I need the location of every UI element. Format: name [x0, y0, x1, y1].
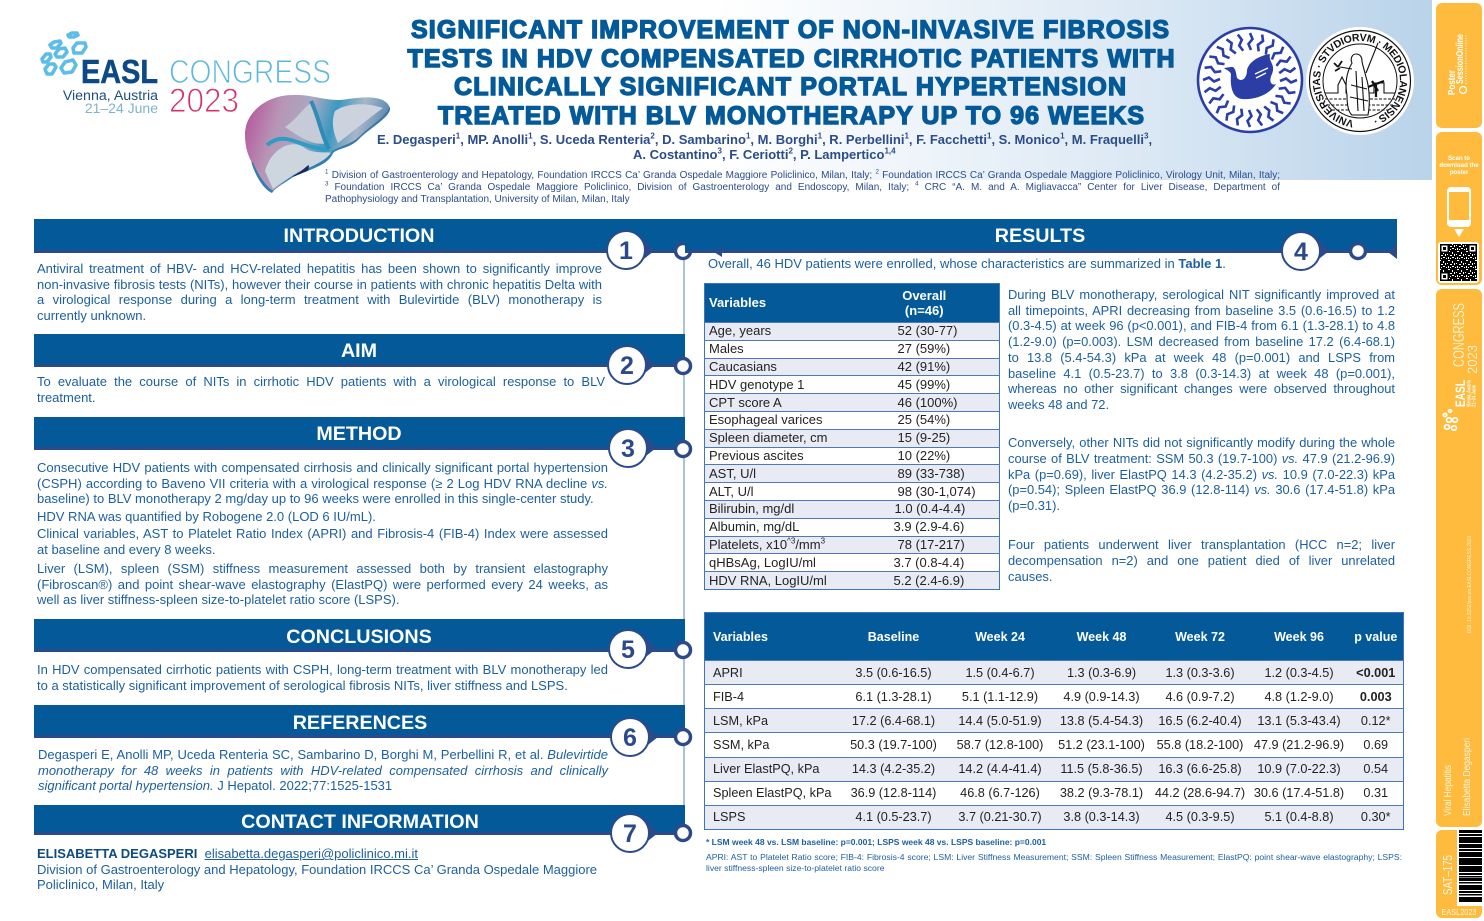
table 2: NIT values over time: LSPS: [713, 810, 745, 824]
blue university seal: [1196, 26, 1304, 134]
table 2: NIT values over time: 13.8 (5.4-54.3): [1060, 714, 1143, 728]
banner: references: [34, 705, 690, 756]
text: aim: To evaluate the course of NITs in cirrhotic HDV patients with a virological response to BLV: [37, 374, 605, 389]
table footnote: abbreviations: liver stiffness-spleen size-to-platelet ratio score: [706, 862, 884, 872]
dates: 21–24 June: [85, 100, 158, 116]
table 2: NIT values over time: 16.5 (6.2-40.4): [1158, 714, 1242, 728]
scan caption: Scan to: [1448, 154, 1470, 162]
table 2: NIT values over time: 46.8 (6.7-126): [960, 786, 1040, 800]
divider: column connector: [683, 253, 685, 830]
table 1: baseline characteristics: 1.0 (0.4-4.4): [894, 501, 965, 516]
table 2: NIT values over time: 17.2 (6.4-68.1): [852, 714, 935, 728]
table 2: NIT values over time: Week 24: [975, 630, 1025, 644]
header gradient background: [0, 0, 1432, 180]
text: results findings: [1008, 287, 1396, 584]
poster session online wordmark: Poster: [1447, 70, 1458, 95]
banner: references: 6: [623, 724, 637, 752]
table 2: NIT values over time: LSM, kPa: [713, 714, 768, 728]
icon: down arrow: [1454, 229, 1464, 237]
table 2: NIT values over time: 36.9 (12.8-114): [851, 786, 936, 800]
text: contact: [37, 846, 597, 892]
table 2: NIT values over time: [704, 612, 1404, 830]
affiliations: 1 Division of Gastroenterology and Hepatology, Foundation IRCCS Ca’ Granda Ospedale Maggiore Policlinico, Milan, Italy; 2 Foundation IRCCS Ca’ Granda Ospedale Maggiore Policlinico, Virology Unit, Milan, Italy;: [325, 169, 1280, 181]
table 2: NIT values over time: Spleen ElastPQ, kPa: [713, 786, 831, 800]
rotated location and dates: [1466, 379, 1478, 407]
rotated presenter: Elisabetta Degasperi: [1462, 738, 1473, 816]
table 1: baseline characteristics: ALT, U/l: [709, 484, 754, 499]
table 2: NIT values over time: 58.7 (12.8-100): [957, 738, 1043, 752]
table 2: NIT values over time: 3.5 (0.6-16.5): [855, 666, 932, 680]
text: introduction: a virological response during a long-term treatment with Bulevirtide (BLV) monotherapy is: [37, 292, 602, 307]
table 2: NIT values over time: 6.1 (1.3-28.1): [855, 690, 932, 704]
text: method: well as liver stiffness-spleen size-to-platelet ratio score (LSPS).: [37, 592, 399, 607]
table 1: baseline characteristics: 89 (33-738): [898, 466, 965, 481]
table 2: NIT values over time: Week 96: [1274, 630, 1324, 644]
table 1: baseline characteristics: 3.9 (2.9-4.6): [894, 519, 964, 534]
title: CLINICALLY SIGNIFICANT PORTAL HYPERTENSION: [454, 73, 1126, 101]
text: aim: treatment.: [37, 390, 96, 405]
table 2: NIT values over time: Liver ElastPQ, kPa: [713, 762, 819, 776]
banner: contact information: CONTACT INFORMATION: [241, 811, 479, 833]
table 1: baseline characteristics: 78 (17-217): [898, 537, 965, 552]
table 2: NIT values over time: Week 48: [1077, 630, 1126, 644]
barcode: [1457, 830, 1482, 906]
table 2: NIT values over time: 0.12*: [1361, 714, 1391, 728]
text: method: [37, 460, 608, 607]
text: conclusions: In HDV compensated cirrhotic patients with CSPH, long-term treatment with BLV monotherapy led: [37, 662, 608, 677]
banner: results: RESULTS: [995, 225, 1085, 247]
text: introduction: Antiviral treatment of HBV- and HCV-related hepatitis has been shown to significantly improve: [37, 261, 602, 276]
table footnote: significance: * LSM week 48 vs. LSM baseline: p=0.001; LSPS week 48 vs. LSPS baseline: p=0.001: [706, 837, 1046, 847]
banner: contact information: 7: [623, 820, 637, 848]
text: conclusions: to a statistically significant improvement of serological fibrosis NITs, liver stiffness and LSPS.: [37, 678, 568, 693]
rotated EASL mark: EASL: [1452, 380, 1468, 407]
text: introduction: non-invasive fibrosis tests (NITs), however their course in patients with chronic hepatitis Delta with: [37, 277, 602, 292]
table 1: baseline characteristics: (n=46): [905, 303, 944, 318]
table 2: NIT values over time: 4.9 (0.9-14.3): [1063, 690, 1140, 704]
text: method: Clinical variables, AST to Platelet Ratio Index (APRI) and Fibrosis-4 (FIB-4) Index were assessed: [37, 526, 608, 541]
text: results findings: baseline 4.1 (0.5-23.7) to 3.8 (0.3-14.3) at week 48 (p=0.001),: [1008, 366, 1395, 381]
text: references: Degasperi E, Anolli MP, Uceda Renteria SC, Sambarino D, Borghi M, Perbellini R, et al. Bulevirtide: [38, 747, 608, 762]
table 2: NIT values over time: 30.6 (17.4-51.8): [1254, 786, 1344, 800]
table 2: NIT values over time: Week 72: [1175, 630, 1225, 644]
EASL congress logo: [40, 31, 331, 120]
table 1: baseline characteristics: Platelets, x10^3/mm3: [709, 537, 825, 552]
table 2: NIT values over time: 47.9 (21.2-96.9): [1254, 738, 1344, 752]
sidebar panel: poster number and barcode: [1436, 830, 1482, 918]
text: references: monotherapy for 48 weeks in patients with HDV-related compensated cirrhosis and clinically: [38, 763, 608, 778]
authors: E. Degasperi1, MP. Anolli1, S. Uceda Renteria2, D. Sambarino1, M. Borghi1, R. Perbellini1, F. Facchetti1, S. Monico1, M. Fraquelli3,: [377, 131, 1152, 146]
rotated congress year: 2023: [1464, 345, 1480, 374]
table 1: baseline characteristics: Albumin, mg/dL: [709, 519, 799, 534]
QR code: [1438, 242, 1479, 283]
text: method: (Fibroscan®) and point shear-wave elastography (ElastPQ) were performed every 24 weeks, as: [37, 577, 608, 592]
text: results findings: weeks 48 and 72.: [1008, 397, 1109, 412]
EASL wordmark: EASL: [81, 53, 158, 90]
table 1: baseline characteristics: Spleen diameter, cm: [709, 430, 828, 445]
table 1: baseline characteristics: 98 (30-1,074): [898, 484, 976, 499]
table 2: NIT values over time: 38.2 (9.3-78.1): [1060, 786, 1143, 800]
banner: introduction: INTRODUCTION: [284, 225, 434, 247]
table 1: baseline characteristics: Bilirubin, mg/dl: [709, 501, 794, 516]
table 1: baseline characteristics: 42 (91%): [898, 359, 950, 374]
text: references: significant portal hypertension. J Hepatol. 2022;77:1525-1531: [38, 778, 392, 793]
table 2: NIT values over time: p value: [1354, 630, 1397, 644]
table 1: baseline characteristics: Age, years: [709, 323, 771, 338]
affiliations: Pathophysiology and Transplantation, University of Milan, Milan, Italy: [325, 194, 630, 205]
table 2: NIT values over time: 14.3 (4.2-35.2): [852, 762, 935, 776]
sidebar panel: scan to download: [1436, 132, 1482, 285]
text: results findings: Conversely, other NITs did not significantly modify during the whole: [1008, 435, 1395, 450]
table 2: NIT values over time: 3.8 (0.3-14.3): [1063, 810, 1140, 824]
seal lettering: VNIVERSITAS · STVDIORVM · MEDIOLANENSIS ·: [1312, 34, 1408, 128]
banner: contact information: [34, 805, 690, 852]
icon: hexagon cluster: [1443, 410, 1458, 430]
table 2: NIT values over time: 4.5 (0.3-9.5): [1165, 810, 1235, 824]
table 2: NIT values over time: 4.8 (1.2-9.0): [1264, 690, 1334, 704]
table 1: baseline characteristics: CPT score A: [709, 395, 782, 410]
table 2: NIT values over time: 0.30*: [1361, 810, 1391, 824]
text: method: HDV RNA was quantified by Robogene 2.0 (LOD 6 IU/mL).: [37, 509, 376, 524]
table 1: baseline characteristics: 5.2 (2.4-6.9): [894, 573, 964, 588]
location: Vienna, Austria: [63, 88, 158, 104]
scan caption: poster: [1450, 168, 1468, 176]
table 2: NIT values over time: Variables: [713, 630, 768, 644]
table 1: baseline characteristics: 45 (99%): [898, 377, 950, 392]
text: results findings: causes.: [1008, 569, 1052, 584]
text: results findings: to 13.8 (5.4-54.3) kPa at week 48 (p=0.001) and LSPS from: [1008, 350, 1395, 365]
table 2: NIT values over time: 4.6 (0.9-7.2): [1165, 690, 1235, 704]
text: introduction: [37, 261, 602, 323]
table 1: baseline characteristics: Males: [709, 341, 744, 356]
rotated congress name: CONGRESS: [1451, 303, 1468, 367]
banner: references: REFERENCES: [293, 712, 427, 734]
banner: method: 3: [621, 435, 635, 463]
text: results intro: Overall, 46 HDV patients were enrolled, whose characteristics are summarized in Table 1.: [708, 256, 1226, 271]
text: contact: Division of Gastroenterology and Hepatology, Foundation IRCCS Ca’ Granda Ospedale Maggiore: [37, 862, 597, 877]
table 2: NIT values over time: 51.2 (23.1-100): [1058, 738, 1145, 752]
banner: introduction: 1: [619, 237, 633, 265]
table 2: NIT values over time: 55.8 (18.2-100): [1157, 738, 1243, 752]
table 1: baseline characteristics: Variables: [709, 295, 766, 310]
banner: results: [685, 219, 1397, 270]
table footnote: abbreviations: APRI: AST to Platelet Ratio score; FIB-4: Fibrosis-4 score; LSM: Liver Stiffness Measurement; SSM: Spleen Stiffness Measurement; ElastPQ: point shear-wave elastography; LSPS:: [706, 852, 1402, 862]
table 1: baseline characteristics: Previous ascites: [709, 448, 804, 463]
rotated DOI: DOI: 10.3252/pso.eu.EASLCONGRESS.2023: [1467, 536, 1473, 633]
table 2: NIT values over time: FIB-4: [713, 690, 744, 704]
table 1: baseline characteristics: 27 (59%): [898, 341, 950, 356]
rotated location and dates: 21–24 June: [1472, 385, 1478, 407]
text: conclusions: [37, 662, 608, 693]
poster session online wordmark: [1447, 34, 1466, 95]
banner: method: [34, 417, 690, 467]
text: references: [38, 747, 609, 793]
conference tag: EASL2023: [1442, 907, 1477, 917]
title: TESTS IN HDV COMPENSATED CIRRHOTIC PATIENTS WITH: [408, 45, 1174, 73]
table 2: NIT values over time: 1.3 (0.3-6.9): [1067, 666, 1136, 680]
banner: conclusions: [34, 619, 690, 668]
text: results findings: whereas no other significant changes were observed throughout: [1008, 381, 1395, 396]
banner: aim: AIM: [341, 340, 377, 362]
sidebar panel: poster session online: [1436, 3, 1482, 128]
rotated poster number: SAT–175: [1440, 855, 1455, 895]
table 2: NIT values over time: 0.69: [1363, 738, 1388, 752]
table 1: baseline characteristics: HDV RNA, LogIU/ml: [709, 573, 827, 588]
text: introduction: currently unknown.: [37, 308, 146, 323]
table 2: NIT values over time: 5.1 (1.1-12.9): [962, 690, 1038, 704]
text: contact: Policlinico, Milan, Italy: [37, 877, 164, 892]
table 1: baseline characteristics: 25 (54%): [898, 412, 950, 427]
table 2: NIT values over time: 3.7 (0.21-30.7): [958, 810, 1042, 824]
table 1: baseline characteristics: 52 (30-77): [898, 323, 957, 338]
table 2: NIT values over time: 11.5 (5.8-36.5): [1060, 762, 1143, 776]
scan caption: [1439, 154, 1479, 176]
table 1: baseline characteristics: AST, U/l: [709, 466, 756, 481]
table footnote: abbreviations: [706, 852, 1402, 872]
table 2: NIT values over time: 10.9 (7.0-22.3): [1257, 762, 1341, 776]
table 2: NIT values over time: 14.4 (5.0-51.9): [958, 714, 1042, 728]
seal bird: [1224, 54, 1276, 99]
text: results findings: Four patients underwent liver transplantation (HCC n=2; liver: [1008, 537, 1395, 552]
Milan university seal: [1306, 27, 1414, 135]
table 2: NIT values over time: APRI: [713, 666, 743, 680]
table 2: NIT values over time: 1.2 (0.3-4.5): [1264, 666, 1334, 680]
table 2: NIT values over time: SSM, kPa: [713, 738, 769, 752]
sidebar panel: congress details: [1436, 289, 1482, 827]
banner: method: METHOD: [316, 423, 402, 445]
icon: phone: [1447, 187, 1471, 227]
table 1: baseline characteristics: qHBsAg, LogIU/ml: [709, 555, 816, 570]
text: contact: ELISABETTA DEGASPERI elisabetta.degasperi@policlinico.mi.it: [37, 846, 418, 861]
banner: aim: [34, 334, 690, 384]
rotated topic: Viral Hepatitis: [1443, 765, 1454, 816]
table 1: baseline characteristics: Overall: [902, 288, 946, 302]
affiliations: 3 Foundation IRCCS Ca’ Granda Ospedale Maggiore Policlinico, Division of Gastroenterology and Endoscopy, Milan, Italy; 4 CRC “A. M. and A. Migliavacca” Center for Liver Disease, Department of: [325, 181, 1280, 193]
text: results findings: During BLV monotherapy, serological NIT significantly improved at: [1008, 287, 1395, 302]
text: results findings: course of BLV treatment: SSM 50.3 (19.7-100) vs. 47.9 (21.2-96.9): [1008, 451, 1395, 466]
title: TREATED WITH BLV MONOTHERAPY UP TO 96 WEEKS: [438, 102, 1144, 130]
text: method: Consecutive HDV patients with compensated cirrhosis and clinically significant portal hypertension: [37, 460, 608, 475]
text: aim: [37, 374, 605, 405]
scan caption: download the: [1439, 162, 1479, 168]
text: method: Liver (LSM), spleen (SSM) stiffness measurement assessed both by transient elastography: [37, 561, 608, 576]
table 1: baseline characteristics: 10 (22%): [898, 448, 950, 463]
table 1: baseline characteristics: [704, 283, 1000, 590]
text: results findings: (0.3-4.5) at week 96 (p<0.001), and FIB-4 from 6.1 (1.3-28.1) to 4.8: [1008, 318, 1395, 333]
banner: conclusions: CONCLUSIONS: [286, 626, 432, 648]
table 2: NIT values over time: 1.5 (0.4-6.7): [965, 666, 1035, 680]
table 1: baseline characteristics: Esophageal varices: [709, 412, 822, 427]
table 2: NIT values over time: Baseline: [868, 630, 919, 644]
text: results findings: kPa (p=0.69), liver ElastPQ 14.3 (4.2-35.2) vs. 10.9 (7.0-22.3) kPa: [1008, 467, 1395, 482]
text: method: baseline) to BLV monotherapy 2 mg/day up to 96 weeks were enrolled in this single-center study.: [37, 491, 594, 506]
seal rays: [1203, 33, 1297, 127]
table 2: NIT values over time: 0.31: [1363, 786, 1388, 800]
table 2: NIT values over time: <0.001: [1356, 666, 1395, 680]
authors: [377, 131, 1152, 162]
liver illustration: [245, 94, 390, 193]
authors: A. Costantino3, F. Ceriotti2, P. Lampertico1,4: [633, 146, 896, 162]
title: [407, 16, 1174, 130]
seal figure: [1325, 43, 1395, 115]
title: SIGNIFICANT IMPROVEMENT OF NON-INVASIVE FIBROSIS: [411, 16, 1169, 44]
table 1: baseline characteristics: 46 (100%): [898, 395, 957, 410]
affiliations: [325, 169, 1280, 205]
table 2: NIT values over time: 4.1 (0.5-23.7): [855, 810, 932, 824]
banner: aim: 2: [620, 352, 634, 380]
table 2: NIT values over time: 0.54: [1363, 762, 1388, 776]
text: method: at baseline and every 8 weeks.: [37, 542, 216, 557]
table 2: NIT values over time: 50.3 (19.7-100): [850, 738, 937, 752]
table 1: baseline characteristics: HDV genotype 1: [709, 377, 804, 392]
table 2: NIT values over time: 5.1 (0.4-8.8): [1264, 810, 1334, 824]
table 1: baseline characteristics: 3.7 (0.8-4.4): [894, 555, 964, 570]
table 2: NIT values over time: 1.3 (0.3-3.6): [1165, 666, 1235, 680]
table 2: NIT values over time: 44.2 (28.6-94.7): [1155, 786, 1245, 800]
table 2: NIT values over time: 16.3 (6.6-25.8): [1158, 762, 1242, 776]
banner: results: 4: [1294, 238, 1308, 266]
text: results findings: (p=0.54); Spleen ElastPQ 36.9 (12.8-114) vs. 30.6 (17.4-51.8) kPa: [1008, 482, 1395, 497]
text: results findings: (1.2-9.0) (p=0.003). LSM decreased from baseline 17.2 (6.4-68.1): [1008, 334, 1395, 349]
table 2: NIT values over time: 0.003: [1360, 690, 1392, 704]
banner: conclusions: 5: [621, 636, 635, 664]
text: results findings: (p=0.31).: [1008, 498, 1060, 513]
text: method: (CSPH) according to Baveno VII criteria with a virological response (≥ 2 Log HDV RNA decline vs.: [37, 476, 608, 491]
year: 2023: [169, 82, 239, 120]
table 1: baseline characteristics: Caucasians: [709, 359, 777, 374]
banner: introduction: [34, 219, 690, 269]
table 2: NIT values over time: 13.1 (5.3-43.4): [1257, 714, 1341, 728]
text: results findings: decompensation n=2) and one patient died of liver unrelated: [1008, 553, 1395, 568]
icon: hexagon cluster: [42, 33, 86, 74]
table 1: baseline characteristics: 15 (9-25): [898, 430, 950, 445]
text: results findings: all timepoints, APRI decreasing from baseline 3.5 (0.6-16.5) to 1.2: [1008, 303, 1395, 318]
rotated location and dates: Vienna, Austria: [1466, 379, 1472, 407]
table 2: NIT values over time: 14.2 (4.4-41.4): [958, 762, 1042, 776]
poster session online wordmark: SessionOnline: [1455, 34, 1466, 84]
